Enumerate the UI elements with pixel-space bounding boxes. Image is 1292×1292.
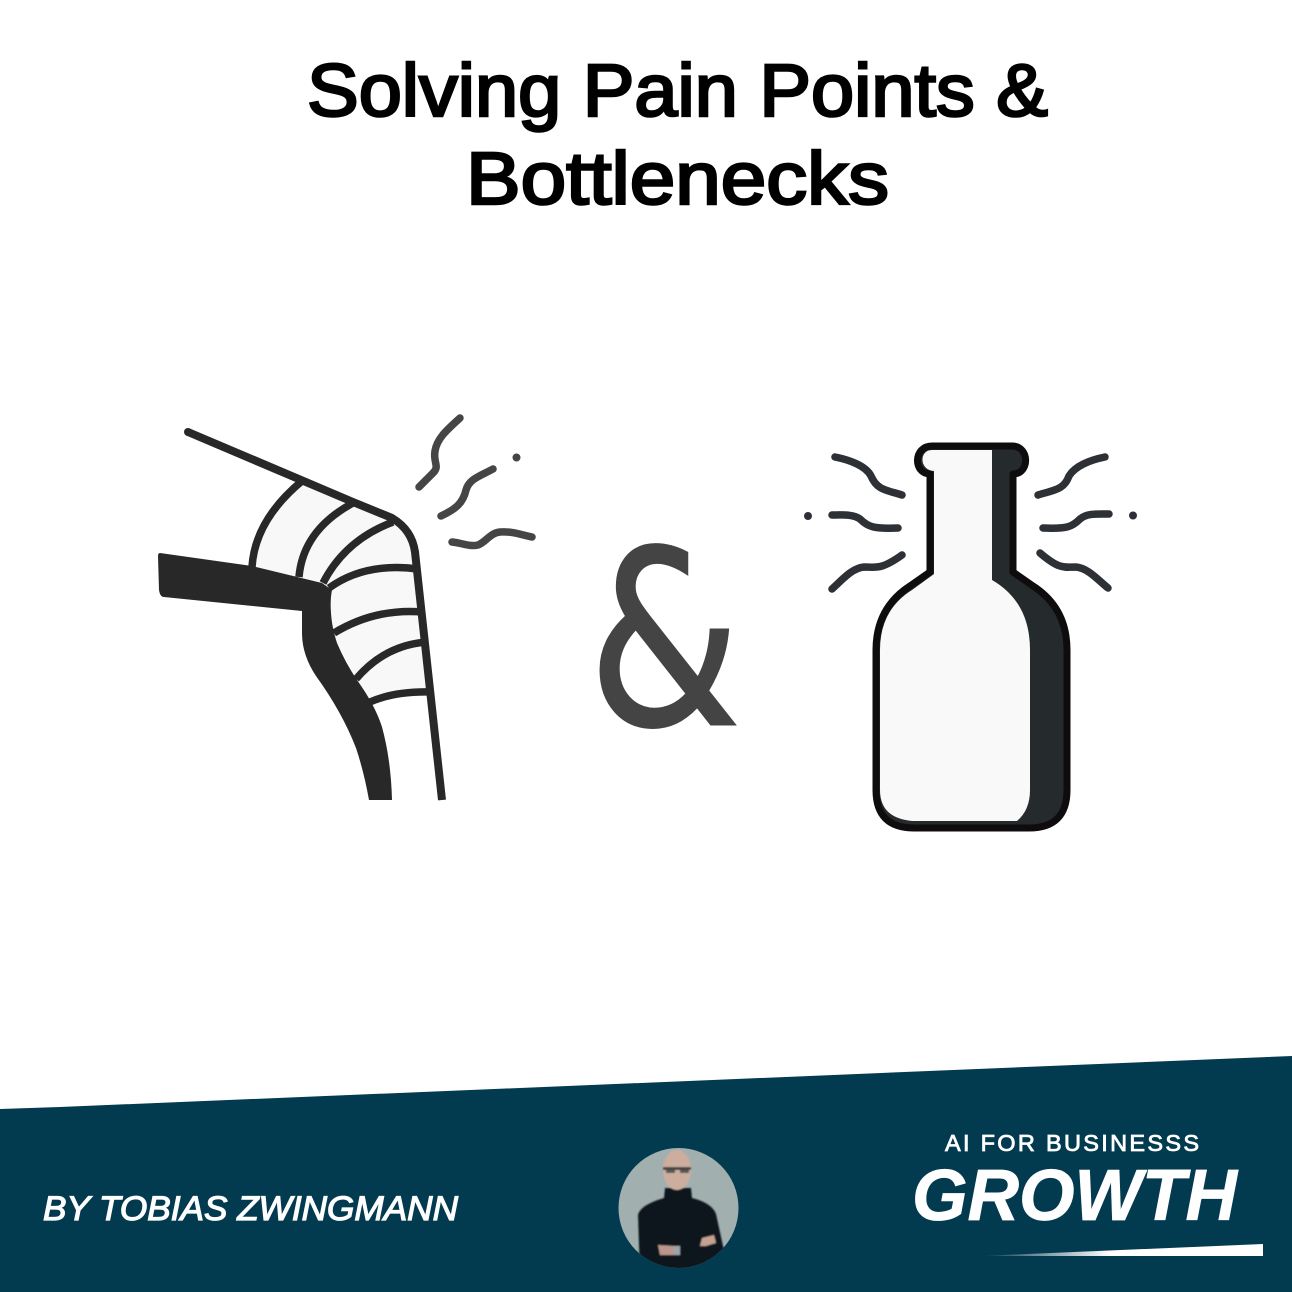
knee outer outline — [188, 432, 442, 800]
bottle light side — [880, 450, 1030, 821]
icon: pain squiggles at knee — [419, 418, 532, 546]
hands — [658, 1245, 675, 1255]
watch — [674, 1246, 680, 1255]
knee joint bands — [252, 481, 432, 702]
knee cap light fill — [252, 482, 430, 703]
logo: AI for Businesss Growth — [912, 1130, 1263, 1256]
logo: AI for Businesss Growth: AI FOR BUSINESSS — [945, 1130, 1199, 1156]
author photo — [618, 1148, 739, 1275]
title — [307, 49, 1048, 220]
torso — [637, 1187, 724, 1268]
icon: painful knee — [158, 428, 442, 800]
knee thick inner band — [158, 553, 392, 800]
ampersand: & — [588, 500, 741, 782]
title: Bottlenecks — [466, 137, 889, 220]
icon: pressure squiggles at bottle — [806, 457, 1136, 589]
head — [663, 1150, 691, 1190]
logo: AI for Businesss Growth: GROWTH — [912, 1156, 1239, 1236]
footer band — [0, 1056, 1292, 1292]
logo underline — [980, 1244, 1263, 1256]
author byline: BY TOBIAS ZWINGMANN — [43, 1190, 458, 1228]
icon: bottle — [876, 446, 1067, 828]
bottle body — [876, 446, 1067, 828]
title: Solving Pain Points & — [307, 49, 1048, 132]
glasses — [663, 1167, 691, 1170]
